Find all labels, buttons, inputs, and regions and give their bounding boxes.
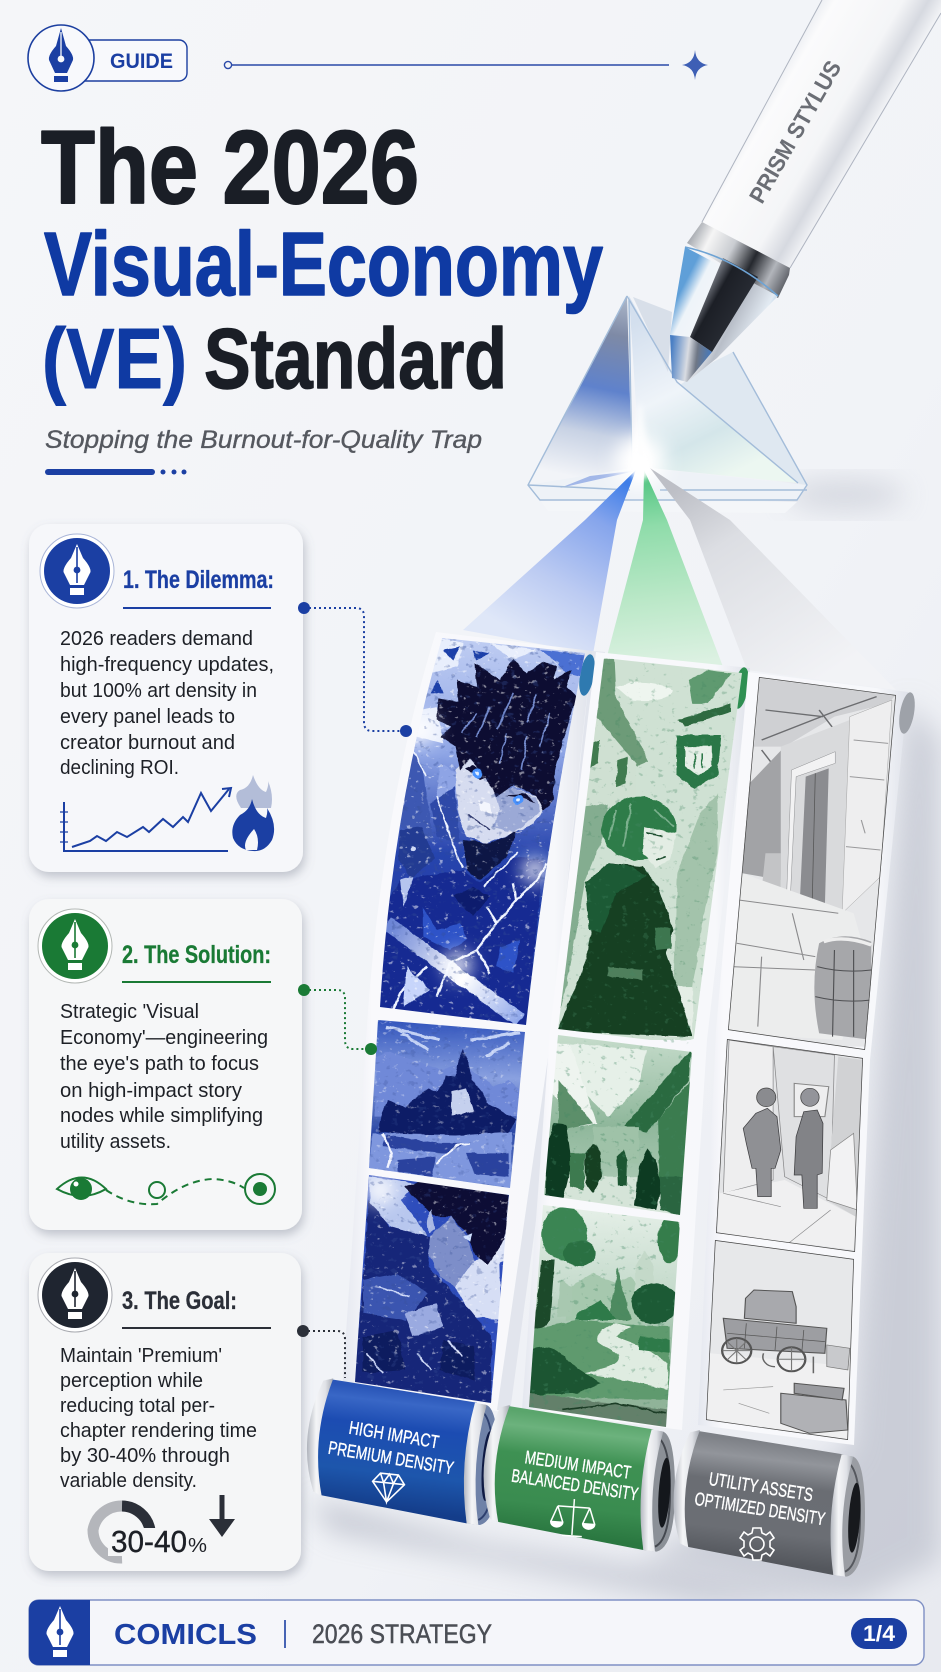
body text: nodes while simplifying [60,1105,263,1127]
panel: forest path [524,1200,685,1430]
badge label: GUIDE [110,50,173,73]
title: (VE) [42,312,187,407]
body text [60,1001,268,1153]
brand name: COMICLS [114,1619,257,1651]
connector: goal to roller [297,1325,345,1378]
light beams [463,456,896,690]
roller: medium impact [484,1405,675,1552]
roller text: utility assets: OPTIMIZED DENSITY [693,1488,827,1529]
roller text: high impact: HIGH IMPACT [347,1417,441,1452]
title: The 2026 [41,110,419,226]
body text: but 100% art density in [60,680,257,702]
panel: wagon and crates [702,1237,859,1443]
connector: solution to blue strip [298,984,377,1055]
subtitle: Stopping the Burnout-for-Quality Trap [45,426,482,454]
heading: 3. The Goal: [122,1287,237,1315]
panel: two figures [714,1037,867,1257]
heading: 2. The Solution: [122,941,271,969]
title [41,110,603,407]
header badge [28,25,187,91]
body text: high-frequency updates, [60,654,274,676]
page badge [851,1618,907,1649]
body text: on high-impact story [60,1080,242,1102]
body text: by 30-40% through [60,1445,230,1467]
icon: rising chart [60,788,231,851]
panel: goal [29,1253,301,1571]
icon: green nib badge [38,909,112,983]
icon: down arrow [209,1495,235,1537]
stylus label: PRISM STYLUS [744,56,846,208]
body text: perception while [60,1370,203,1392]
roller text: utility assets: UTILITY ASSETS [708,1468,815,1505]
title: Standard [204,312,507,407]
footer tagline: 2026 STRATEGY [312,1619,492,1649]
page badge: 1/4 [863,1621,896,1646]
icon: header nib [49,28,73,82]
icon: scales [550,1498,596,1537]
panel: market street [544,1035,692,1215]
title: Visual-Economy [44,215,603,315]
panel: girl in town [558,658,742,1044]
roller text: medium impact: BALANCED DENSITY [510,1465,640,1504]
film strip: grey utility assets [698,670,918,1445]
icon: gear [740,1528,774,1560]
body text: 2026 readers demand [60,628,253,650]
panel: solution [29,899,302,1230]
body text: reducing total per- [60,1395,215,1417]
body text: variable density. [60,1470,197,1492]
icon: diamond [371,1472,405,1504]
roller text: medium impact: MEDIUM IMPACT [523,1446,632,1483]
prism [528,296,905,513]
gauge 30-40% [93,1506,207,1559]
panel: dilemma [29,524,303,872]
panel: hero close-up [355,1175,509,1403]
panel: castle landscape [369,1020,525,1188]
footer bar [29,1600,924,1665]
icon: flame [232,775,274,851]
roller text: high impact [327,1417,455,1478]
body text: every panel leads to [60,706,235,728]
header rule with sparkle [224,50,708,80]
body text [60,628,274,779]
body text: Maintain 'Premium' [60,1345,222,1367]
body text: chapter rendering time [60,1420,257,1442]
film strip: green medium impact [522,650,752,1430]
body text: utility assets. [60,1131,171,1153]
body text: declining ROI. [60,757,179,779]
film strip: blue high impact [342,630,605,1412]
roller: high impact [307,1378,498,1525]
roller text: high impact: PREMIUM DENSITY [327,1437,455,1478]
body text: creator burnout and [60,732,235,754]
icon: dark nib badge [38,1258,112,1332]
panel: hero portrait [380,638,585,1025]
panel: alley door [723,670,903,1050]
roller text: utility assets [693,1468,827,1529]
heading: 1. The Dilemma: [123,566,274,594]
body text [60,1345,257,1492]
shadow of strips [310,700,941,1605]
gauge 30-40%: % [188,1535,207,1557]
connector: dilemma to blue strip [298,602,412,737]
body text: the eye's path to focus [60,1053,259,1075]
roller text: medium impact [510,1446,640,1504]
body text: Strategic 'Visual [60,1001,199,1023]
gauge 30-40%: 30-40 [111,1524,187,1559]
roller: utility assets [674,1430,865,1577]
icon: eye path [57,1174,275,1204]
stylus [670,0,941,382]
footer logo block [29,1600,90,1665]
body text: Economy'—engineering [60,1027,268,1049]
icon: blue nib badge [40,534,114,608]
subtitle accent [45,469,186,475]
